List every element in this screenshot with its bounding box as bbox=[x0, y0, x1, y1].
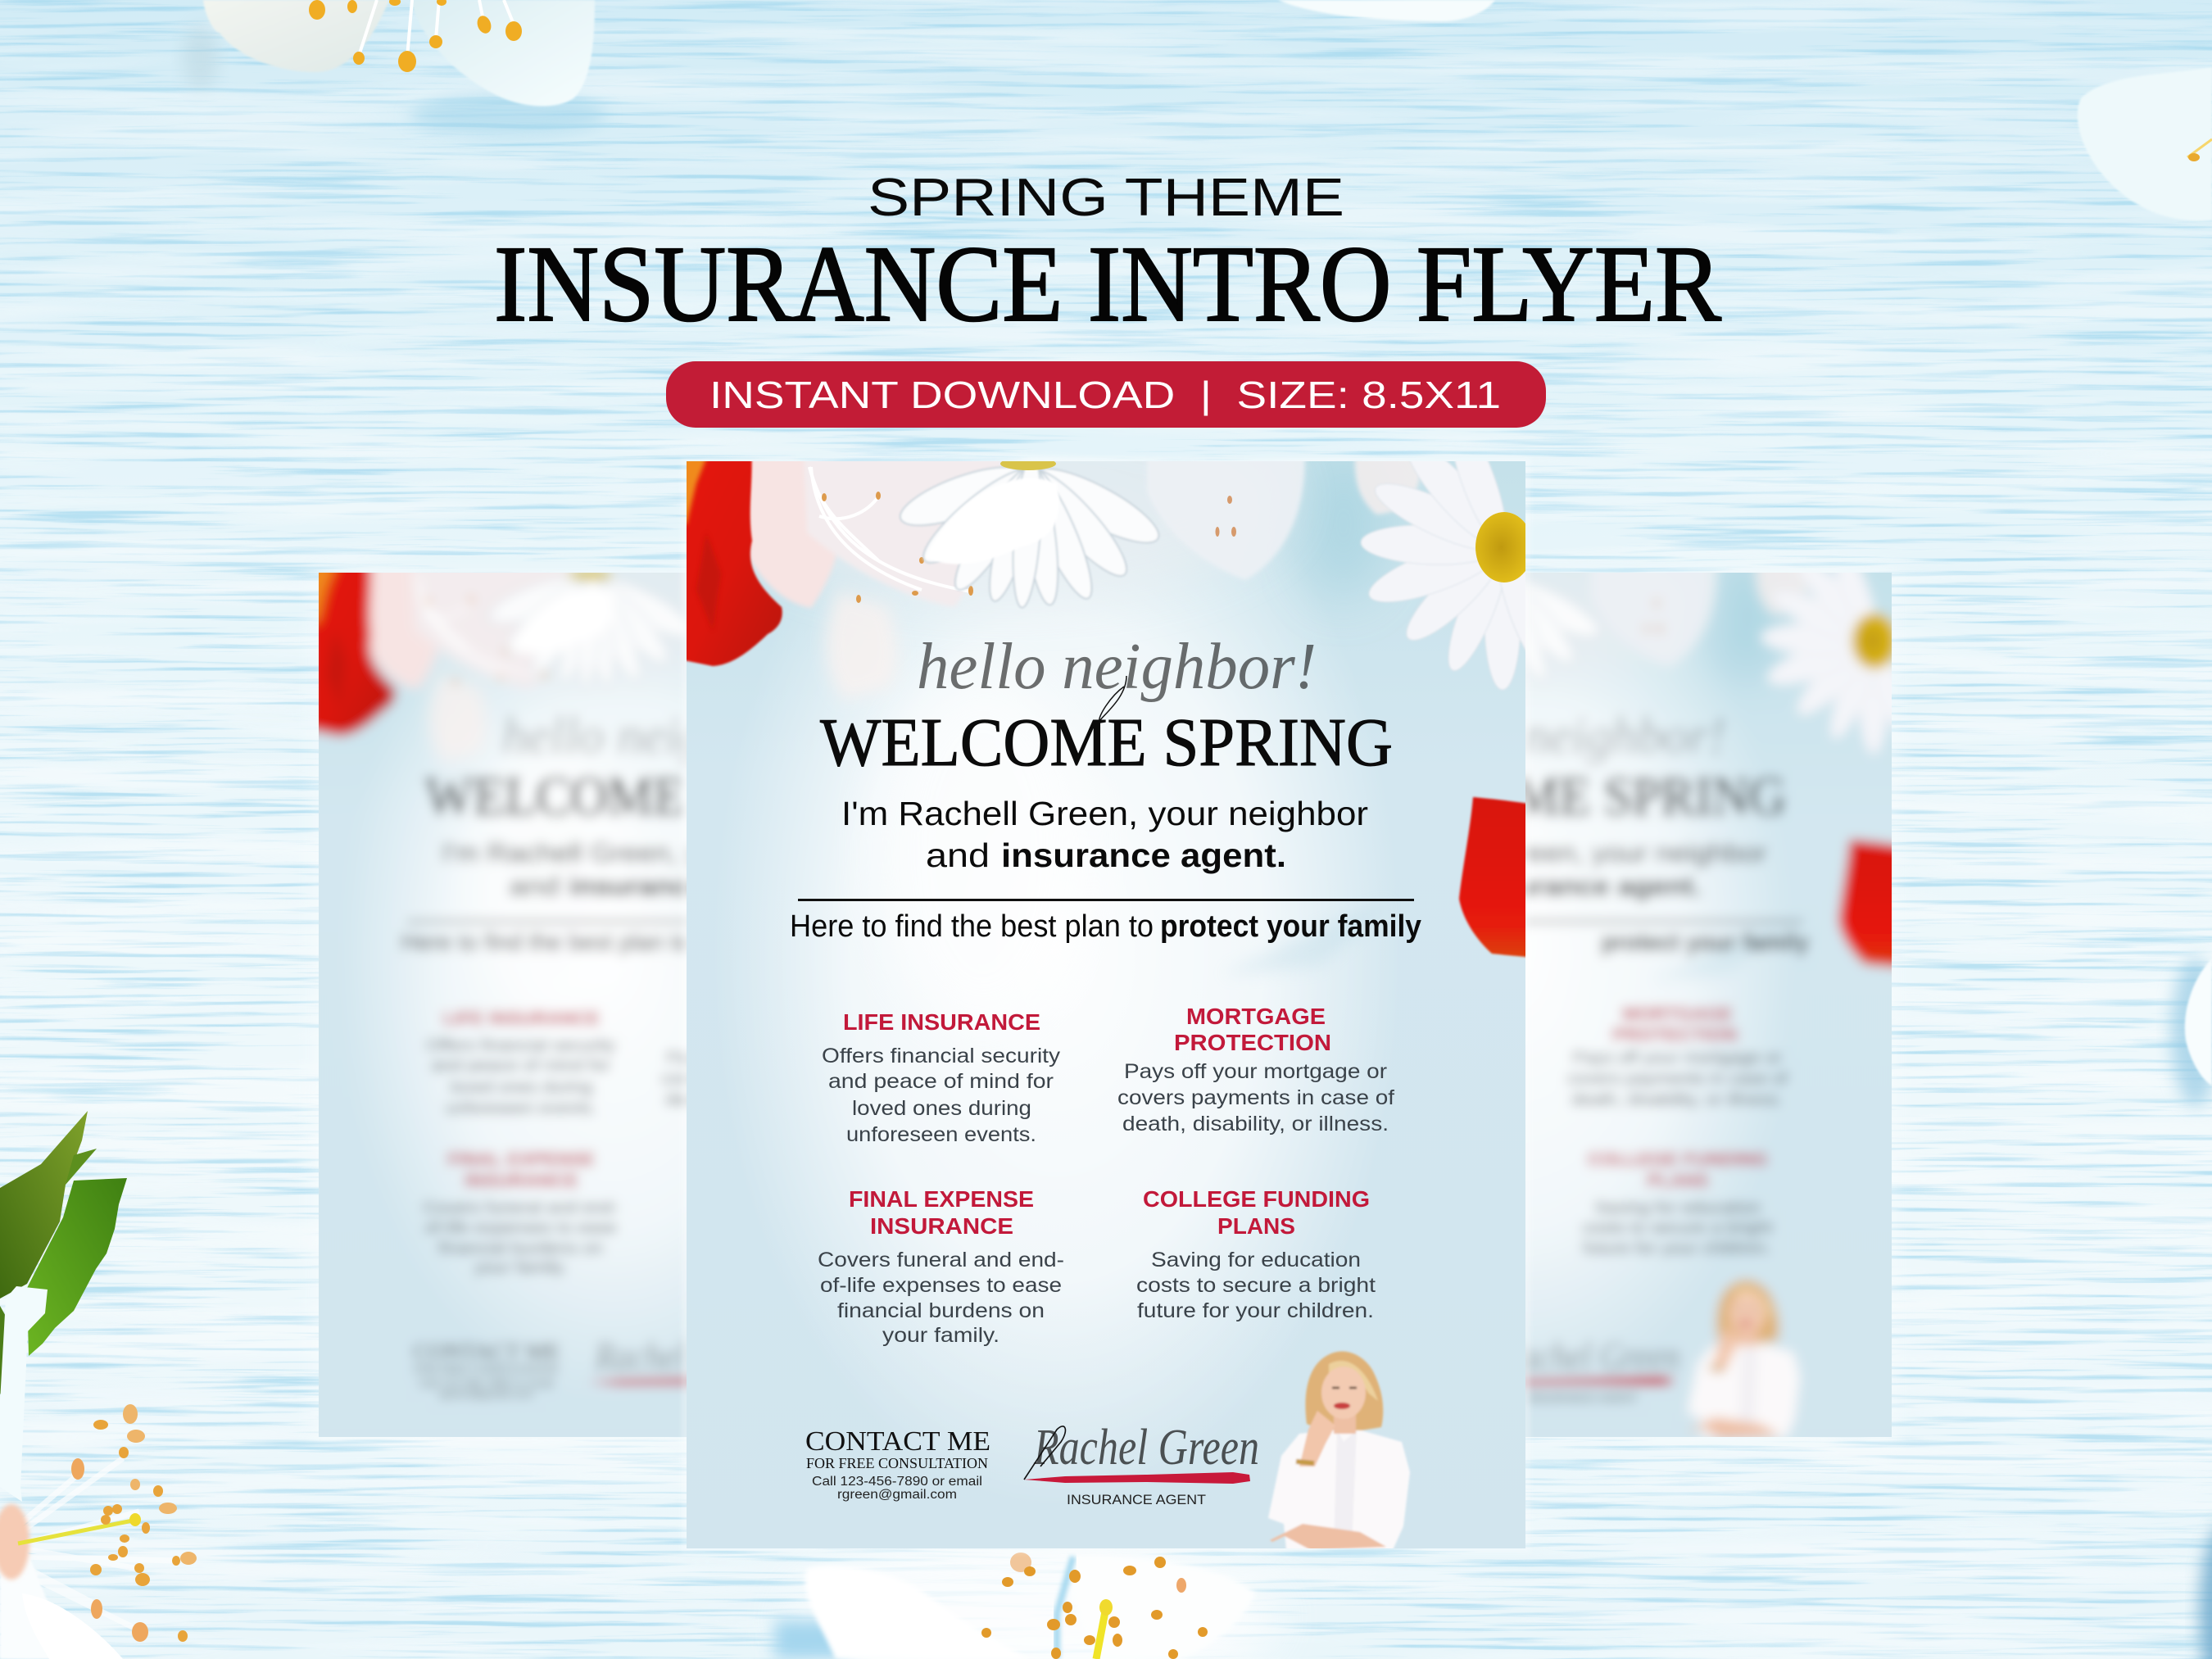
contact block: rgreen@gmail.com bbox=[837, 1488, 957, 1502]
icon: white stem bbox=[0, 1286, 48, 1502]
service: final expense insurance: your family. bbox=[882, 1324, 999, 1347]
panel: left blurred flyer preview: loved ones during bbox=[451, 1078, 593, 1096]
panel: left blurred flyer preview: FINAL EXPENSE bbox=[447, 1149, 595, 1169]
service: mortgage protection: MORTGAGE bbox=[1186, 1004, 1326, 1029]
flower: top-left white blossom bbox=[203, 0, 595, 107]
panel: right blurred flyer preview: PLANS bbox=[1647, 1171, 1709, 1191]
service: mortgage protection: death, disability, or illness. bbox=[1122, 1113, 1389, 1135]
contact block: FOR FREE CONSULTATION bbox=[806, 1455, 988, 1471]
service: final expense insurance: INSURANCE bbox=[870, 1213, 1013, 1239]
panel: left blurred flyer preview: covers payments in case of bbox=[661, 1070, 882, 1088]
tagline: Here to find the best plan to bbox=[790, 909, 1154, 944]
service: final expense insurance: of-life expenses to ease bbox=[820, 1274, 1062, 1297]
panel: right blurred flyer preview bbox=[1525, 569, 1900, 1447]
panel: left blurred flyer preview: INSURANCE bbox=[465, 1171, 578, 1191]
panel: right blurred flyer preview: MORTGAGE bbox=[1622, 1004, 1733, 1024]
intro text: insurance agent. bbox=[1001, 836, 1286, 874]
script: hello neighbor!: hello neighbor! bbox=[917, 631, 1317, 703]
service: final expense insurance: Covers funeral and end- bbox=[818, 1249, 1064, 1271]
panel: right blurred flyer preview: PROTECTION bbox=[1612, 1025, 1738, 1045]
panel: left blurred flyer preview: Covers funeral and end- bbox=[423, 1199, 619, 1217]
panel: left blurred flyer preview: Rachel Green bbox=[594, 1334, 774, 1379]
service: college funding plans: PLANS bbox=[1217, 1213, 1295, 1239]
panel: right blurred flyer preview: hello neighbor! bbox=[1407, 706, 1725, 764]
panel: left blurred flyer preview: your family. bbox=[474, 1259, 568, 1277]
panel: left blurred flyer preview: hello neighbor! bbox=[501, 706, 819, 764]
tagline bbox=[790, 909, 1421, 944]
red poppy petal at top left bbox=[672, 442, 782, 666]
panel: right blurred flyer preview: Rachel Green bbox=[1500, 1334, 1680, 1379]
panel: right blurred flyer preview: covers payments in case of bbox=[1567, 1070, 1788, 1088]
panel: right blurred flyer preview: costs to secure a bright bbox=[1582, 1219, 1773, 1237]
service: life insurance bbox=[822, 1009, 1061, 1146]
contact block bbox=[805, 1426, 990, 1502]
panel: left blurred flyer preview: financial burdens on bbox=[438, 1240, 603, 1258]
badge: instant download and size: INSTANT DOWNLOAD | SIZE: 8.5X11 bbox=[709, 374, 1501, 416]
service: life insurance: unforeseen events. bbox=[846, 1123, 1036, 1146]
panel: right blurred flyer preview: insurance agent. bbox=[1475, 871, 1702, 901]
service: college funding plans: future for your children. bbox=[1137, 1299, 1374, 1322]
service: life insurance: and peace of mind for bbox=[828, 1070, 1054, 1093]
flyer artwork: flowers, petals and portrait bbox=[631, 393, 1581, 1606]
flower: bottom-centre white blossom bbox=[774, 1544, 1278, 1659]
service: life insurance: loved ones during bbox=[852, 1097, 1031, 1120]
panel: left blurred flyer preview: unforeseen events. bbox=[446, 1099, 596, 1117]
panel: left blurred flyer preview: death, disability, or illness. bbox=[665, 1091, 877, 1109]
service: mortgage protection: PROTECTION bbox=[1174, 1030, 1331, 1055]
panel: left blurred flyer preview: FOR FREE CONSULTATION bbox=[414, 1363, 559, 1376]
service: mortgage protection bbox=[1117, 1004, 1394, 1135]
badge: instant download and size bbox=[666, 361, 1546, 428]
service: final expense insurance bbox=[818, 1186, 1064, 1347]
intro text bbox=[841, 795, 1368, 874]
panel: left blurred flyer preview: of-life expenses to ease bbox=[425, 1219, 617, 1237]
panel: right blurred flyer preview: COLLEGE FUNDING bbox=[1588, 1149, 1768, 1169]
panel: left blurred flyer preview: Pays off your mortgage or bbox=[667, 1049, 876, 1067]
panel: right blurred flyer preview: WELCOME SPRING bbox=[1331, 766, 1786, 827]
panel: right blurred flyer preview: Saving for education bbox=[1594, 1199, 1761, 1217]
red petal at right edge bbox=[1459, 797, 1548, 959]
panel: left blurred flyer preview: and bbox=[509, 871, 560, 901]
service: life insurance: Offers financial security bbox=[822, 1045, 1061, 1067]
panel: left blurred flyer preview: Call 123-456-7890 or email bbox=[419, 1378, 554, 1389]
intro text: and bbox=[926, 836, 990, 874]
panel: right blurred flyer preview: protect your family bbox=[1602, 929, 1809, 956]
panel: right blurred flyer preview: future for your children. bbox=[1583, 1240, 1771, 1258]
panel: main flyer bbox=[682, 458, 1530, 1553]
icon: leaves bbox=[0, 1111, 127, 1394]
panel: left blurred flyer preview bbox=[310, 572, 687, 1444]
heading: WELCOME SPRING: WELCOME SPRING bbox=[820, 705, 1393, 781]
service: final expense insurance: financial burdens on bbox=[837, 1299, 1045, 1322]
petal: right edge bbox=[2185, 959, 2212, 1086]
panel: left blurred flyer preview: Offers financial security bbox=[426, 1037, 616, 1055]
red brush stroke bbox=[1024, 1472, 1250, 1484]
white daisy at top right bbox=[1360, 410, 1563, 690]
service: college funding plans bbox=[1136, 1186, 1376, 1322]
panel: right blurred flyer preview: death, disability, or illness. bbox=[1571, 1091, 1783, 1109]
white daisy at top centre bbox=[894, 456, 1167, 609]
panel: left blurred flyer preview: CONTACT ME bbox=[413, 1339, 560, 1364]
service: college funding plans: Saving for education bbox=[1151, 1249, 1361, 1271]
service: college funding plans: COLLEGE FUNDING bbox=[1143, 1186, 1370, 1212]
service: college funding plans: costs to secure a bright bbox=[1136, 1274, 1376, 1297]
panel: right blurred flyer preview: Pays off your mortgage or bbox=[1573, 1049, 1782, 1067]
white lily at top left bbox=[746, 442, 1003, 700]
soft flower mass along the top bbox=[729, 401, 1286, 598]
panel: left blurred flyer preview: rgreen@gmail.com bbox=[438, 1388, 533, 1399]
title: INSURANCE INTRO FLYER: INSURANCE INTRO FLYER bbox=[494, 223, 1721, 344]
contact block: CONTACT ME bbox=[805, 1426, 990, 1457]
panel: right blurred flyer preview: I'm Rachell Green, your neighbor bbox=[1348, 837, 1767, 868]
panel: left blurred flyer preview: WELCOME SPRING bbox=[425, 766, 880, 827]
label: insurance agent: INSURANCE AGENT bbox=[1067, 1492, 1206, 1507]
service: life insurance: LIFE INSURANCE bbox=[843, 1009, 1040, 1035]
panel: left blurred flyer preview: Here to find the best plan to bbox=[401, 929, 690, 956]
service: final expense insurance: FINAL EXPENSE bbox=[849, 1186, 1034, 1212]
signature: Rachel Green: Rachel Green bbox=[1033, 1420, 1259, 1475]
heading: SPRING THEME: SPRING THEME bbox=[868, 167, 1344, 227]
service: mortgage protection: covers payments in case of bbox=[1117, 1086, 1394, 1109]
panel: left blurred flyer preview: I'm Rachell Green, your neighbor bbox=[442, 837, 861, 868]
petal: top right bbox=[2078, 67, 2212, 220]
panel: right blurred flyer preview: INSURANCE AGENT bbox=[1527, 1392, 1638, 1404]
icon: blossom filaments and anthers bbox=[0, 1404, 197, 1659]
panel: left blurred flyer preview: insurance agent. bbox=[569, 871, 796, 901]
panel: left blurred flyer preview: LIFE INSURANCE bbox=[443, 1009, 600, 1029]
service: mortgage protection: Pays off your mortgage or bbox=[1124, 1060, 1387, 1083]
portrait: insurance agent bbox=[1268, 1352, 1410, 1550]
translucent flower at top centre right bbox=[1147, 442, 1422, 580]
contact block: Call 123-456-7890 or email bbox=[812, 1475, 982, 1489]
tagline: protect your family bbox=[1160, 909, 1421, 944]
intro text: I'm Rachell Green, your neighbor bbox=[841, 795, 1368, 832]
petal: top centre bbox=[1278, 0, 1495, 21]
plant: bottom-left leaves and white blossom bbox=[0, 1111, 197, 1659]
panel: left blurred flyer preview: and peace of mind for bbox=[432, 1057, 611, 1075]
